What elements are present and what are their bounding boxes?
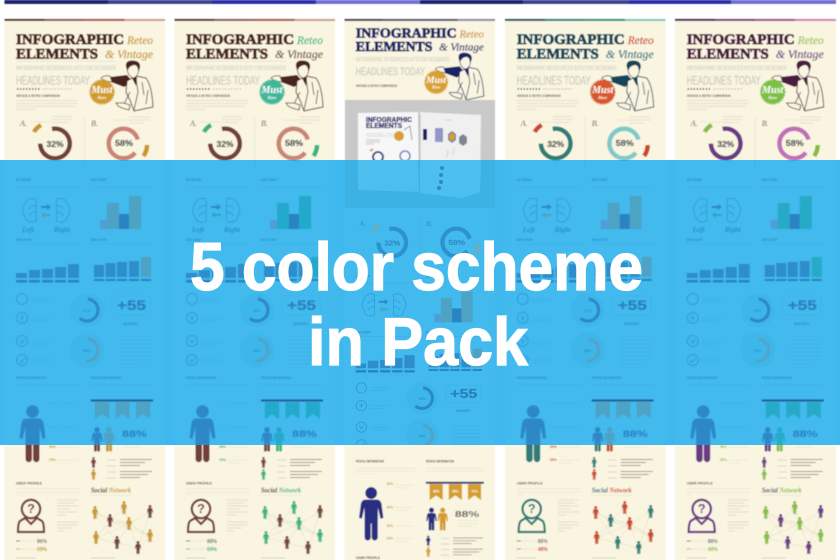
chart: donuts A and B: A. — [19, 119, 27, 128]
title: ELEMENTS — [16, 46, 98, 62]
headings block — [687, 65, 787, 98]
chart: donuts A and B: 58% — [115, 139, 133, 148]
panel: purple and green scheme column — [675, 19, 836, 560]
banner overlay: teal column charts: +55 — [618, 297, 647, 313]
people and social network section: 49% — [708, 547, 718, 553]
banner overlay: navy column charts: 58% — [448, 238, 466, 247]
banner overlay: teal column charts: PEOPLE INFORMATION — [592, 376, 622, 380]
people and social network section: 88% — [538, 539, 548, 545]
banner overlay: purple column charts: 55% — [754, 349, 762, 353]
chart: donuts A and B: B. — [91, 119, 98, 128]
people and social network section: 86% — [37, 539, 48, 545]
people and social network section: 88% — [207, 539, 218, 545]
chart: donuts A and B: 32% — [216, 140, 234, 149]
people and social network section: Social Network — [592, 486, 632, 494]
people and social network section: 39% — [550, 445, 558, 449]
people and social network section: ? — [528, 501, 536, 516]
badge: must have: Must — [761, 85, 784, 96]
banner overlay: teal column charts: BAR CHART — [592, 178, 608, 182]
headings block: HEADLINES TODAY — [186, 74, 260, 88]
badge: must have — [761, 80, 784, 104]
banner overlay: brown and gold column charts: 67% — [83, 309, 91, 313]
banner overlay: teal column charts: BUDGET — [624, 322, 640, 326]
badge: must have: Have — [597, 95, 607, 100]
headings block: VINTAGE & RETRO COMPARISON — [186, 94, 230, 98]
banner overlay: brown and green column charts: 55% — [253, 349, 261, 353]
banner overlay: purple column charts: Right — [724, 226, 742, 234]
badge: must have: Have — [97, 95, 107, 100]
headings block: HEADLINES TODAY — [356, 66, 425, 78]
chart: donuts A and B — [517, 61, 651, 168]
banner overlay: navy column charts: BAR CHART — [426, 275, 442, 279]
people and social network section: Social Network — [261, 486, 301, 494]
banner overlay: purple column charts: 67% — [754, 309, 762, 313]
lower section of navy column: USER PROFILE — [356, 556, 381, 560]
title: Reteo — [296, 35, 323, 47]
banner overlay: brown and gold column charts: BAR CHART — [16, 238, 33, 242]
lower section of navy column: PEOPLE INFORMATION — [426, 460, 454, 464]
people and social network section: Social Network — [91, 486, 131, 494]
title: Reteo — [627, 35, 654, 47]
people and social network section: 29% — [550, 458, 558, 462]
headings block: HEADLINES TODAY — [16, 74, 90, 88]
title: ELEMENTS — [186, 46, 268, 62]
people and social network section — [517, 385, 654, 558]
chart: donuts A and B — [16, 61, 150, 168]
lower section of navy column: 39% — [387, 524, 393, 528]
banner overlay: brown and gold column charts: 55% — [83, 349, 91, 353]
banner overlay: purple column charts: Left — [692, 226, 706, 234]
banner overlay: purple column charts: +55 — [788, 297, 817, 313]
banner overlay: brown and green column charts: Left — [191, 226, 205, 234]
banner overlay: purple column charts: 88% — [793, 429, 818, 439]
headings block: VINTAGE & RETRO COMPARISON — [16, 94, 60, 98]
banner overlay: navy column charts: A. — [358, 219, 366, 228]
chart: donuts A and B: 58% — [786, 139, 804, 148]
banner overlay: navy column charts: 32% — [384, 239, 401, 248]
banner overlay: brown and gold column charts: Left — [21, 226, 35, 234]
banner overlay: navy column charts: BUDGET — [456, 409, 471, 413]
illustration: retro man — [435, 53, 484, 100]
banner overlay: navy column charts — [356, 217, 484, 445]
lower section of navy column — [356, 460, 484, 560]
headings block: INFOGRAPHIC RESOURCES KITS FOR DESIGNER — [186, 65, 286, 72]
banner overlay: teal column charts: 67% — [584, 309, 592, 313]
chart: donuts A and B: A. — [189, 119, 197, 128]
chart: donuts A and B: 32% — [46, 140, 64, 149]
title: ELEMENTS — [517, 46, 599, 62]
banner overlay: brown and green column charts: BUDGET — [293, 322, 309, 326]
banner overlay: teal column charts: Right — [554, 226, 572, 234]
banner overlay: brown and gold column charts: 88% — [122, 429, 147, 439]
column artwork — [186, 32, 323, 558]
headings block — [517, 65, 617, 98]
panel: booklet preview: HEADLINES TODAY — [366, 133, 398, 139]
chart: donuts A and B: 32% — [717, 140, 734, 149]
banner overlay: purple column charts: BUDGET — [794, 322, 810, 326]
banner overlay: navy column charts: 55% — [419, 434, 426, 438]
headings block: HEADLINES TODAY — [687, 74, 761, 88]
headings block: VINTAGE & RETRO COMPARISON — [687, 94, 731, 98]
lower section of navy column: 72% — [471, 490, 478, 494]
banner overlay: brown and green column charts: 88% — [292, 429, 317, 439]
banner tint: faint column panels — [4, 160, 836, 445]
people and social network section: 39% — [720, 445, 728, 449]
chart: donuts A and B — [186, 61, 320, 168]
headings block: INFOGRAPHIC RESOURCES KITS FOR DESIGNER — [517, 65, 617, 72]
title: INFOGRAPHIC — [186, 32, 294, 48]
banner overlay: brown and green column charts: 67% — [253, 309, 261, 313]
chart: donuts A and B: A. — [520, 119, 528, 128]
banner overlay: purple column charts: BAR CHART — [762, 238, 778, 242]
title: ELEMENTS — [687, 46, 769, 62]
banner overlay: brown and gold column charts — [16, 160, 154, 445]
banner overlay: purple column charts: MY BRAIN — [687, 178, 702, 182]
illustration: retro man — [271, 60, 323, 111]
banner overlay: booklet seen through banner — [345, 160, 495, 208]
people and social network section — [186, 385, 323, 558]
banner overlay: teal column charts: BAR CHART — [517, 238, 533, 242]
lower section of navy column: PEOPLE INFORMATION — [356, 460, 384, 464]
banner overlay: navy column charts: 67% — [419, 397, 426, 401]
panel: brown and green scheme column — [174, 19, 335, 560]
people and social network section: 29% — [49, 458, 57, 462]
badge: must have: Must — [425, 76, 446, 86]
banner overlay: brown and green column charts: PEOPLE INFORMATION — [261, 376, 291, 380]
panel: booklet preview: ELEMENTS — [366, 121, 402, 130]
banner overlay: brown and green column charts: Right — [223, 226, 241, 234]
banner overlay: brown and gold column charts: PEOPLE INFORMATION — [91, 376, 121, 380]
title — [186, 32, 323, 62]
badge: must have: Have — [431, 86, 441, 90]
people and social network section — [16, 385, 153, 558]
badge: must have: Must — [260, 85, 284, 96]
title: & Vintage — [439, 41, 484, 53]
headings block — [16, 65, 116, 98]
people and social network section: 29% — [720, 458, 728, 462]
people and social network section: 39% — [219, 445, 227, 449]
title: Reteo — [126, 35, 153, 47]
title — [356, 26, 484, 55]
banner overlay: brown and green column charts — [186, 160, 324, 445]
people and social network section: 39% — [49, 445, 57, 449]
lower section of navy column: 39% — [387, 505, 393, 509]
headings block: VINTAGE & RETRO COMPARISON — [517, 94, 561, 98]
badge: must have: Have — [767, 95, 777, 100]
chart: donuts A and B: B. — [592, 119, 599, 128]
title: Reteo — [459, 28, 484, 40]
illustration: retro man — [101, 60, 153, 111]
title: Reteo — [797, 35, 824, 47]
panel: teal and orange scheme column — [505, 19, 666, 560]
people and social network section: USER PROFILE — [16, 482, 43, 486]
people and social network section — [687, 385, 824, 558]
people and social network section: ? — [27, 501, 35, 516]
chart: donuts A and B — [687, 61, 821, 168]
people and social network section: 69% — [207, 547, 218, 553]
badge: must have: Must — [591, 85, 614, 96]
banner overlay: brown and gold column charts: BUDGET — [123, 322, 139, 326]
banner overlay: brown and green column charts: PEOPLE INFORMATION — [186, 376, 216, 380]
banner overlay: brown and gold column charts: +55 — [117, 297, 146, 313]
badge: must have — [591, 80, 614, 104]
title: & Vintage — [105, 49, 153, 61]
lower section of navy column: 38% — [433, 490, 440, 494]
people and social network section: 69% — [37, 547, 48, 553]
people and social network section: ? — [698, 501, 706, 516]
title: & Vintage — [275, 49, 323, 61]
lower section of navy column: 29% — [387, 536, 393, 540]
banner overlay: brown and green column charts: BAR CHART — [261, 178, 278, 182]
banner overlay: brown and green column charts: MY BRAIN — [186, 178, 201, 182]
banner overlay: teal column charts: PEOPLE INFORMATION — [517, 376, 547, 380]
badge: must have — [260, 80, 284, 104]
banner overlay: teal column charts: Left — [522, 226, 536, 234]
banner overlay: brown and gold column charts: BAR CHART — [91, 238, 108, 242]
chart: donuts A and B: 58% — [616, 139, 634, 148]
banner overlay: purple column charts: PEOPLE INFORMATION — [762, 376, 792, 380]
panel: brown and gold scheme column — [4, 19, 165, 560]
chart: donuts A and B: B. — [261, 119, 268, 128]
title — [687, 32, 824, 62]
banner overlay: purple column charts: BAR CHART — [687, 238, 703, 242]
headings block: INFOGRAPHIC RESOURCES KITS FOR DESIGNER — [16, 65, 116, 72]
banner overlay: brown and green column charts: +55 — [287, 297, 316, 313]
panel: booklet preview — [345, 100, 495, 208]
banner overlay: teal column charts: BAR CHART — [592, 238, 608, 242]
banner overlay: brown and gold column charts: PEOPLE INFORMATION — [16, 376, 46, 380]
headings block: INFOGRAPHIC RESOURCES KITS FOR DESIGNER — [356, 58, 450, 64]
headings block: INFOGRAPHIC RESOURCES KITS FOR DESIGNER — [687, 65, 787, 72]
chart: donuts A and B: B. — [762, 119, 769, 128]
title: INFOGRAPHIC — [687, 32, 795, 48]
banner overlay: teal column charts: MY BRAIN — [517, 178, 532, 182]
title: & Vintage — [606, 49, 654, 61]
lower section of navy column: 45% — [452, 490, 459, 494]
panel: booklet preview: INFOGRAPHIC — [366, 115, 413, 124]
banner overlay: navy column charts: B. — [426, 219, 432, 228]
people and social network section: 88% — [708, 539, 718, 545]
illustration: retro man — [602, 60, 654, 111]
people and social network section: USER PROFILE — [517, 482, 543, 486]
chart: donuts A and B: 32% — [547, 140, 564, 149]
title: & Vintage — [776, 49, 824, 61]
title: INFOGRAPHIC — [356, 26, 457, 41]
banner overlay: navy column charts: BAR CHART — [356, 331, 371, 335]
banner overlay: teal column charts — [516, 160, 654, 445]
banner overlay: teal column charts: 55% — [584, 349, 592, 353]
banner heading: 5 color scheme — [190, 229, 643, 305]
banner overlay: brown and green column charts: BAR CHART — [261, 238, 278, 242]
blue banner — [0, 160, 840, 445]
banner overlay: navy column charts: MY BRAIN — [356, 275, 370, 279]
badge: must have: Must — [90, 85, 114, 96]
banner overlay: navy column charts: +55 — [450, 386, 477, 401]
title — [517, 32, 654, 62]
banner overlay: brown and gold column charts: BAR CHART — [91, 178, 108, 182]
title — [16, 32, 153, 62]
banner overlay: purple column charts: PEOPLE INFORMATION — [687, 376, 717, 380]
banner overlay: purple column charts: BAR CHART — [762, 178, 778, 182]
badge: must have: Have — [267, 95, 277, 100]
people and social network section: USER PROFILE — [687, 482, 713, 486]
illustration: retro man — [772, 60, 824, 111]
chart: donuts A and B: 58% — [285, 139, 303, 148]
panel: navy and gold scheme column — [344, 19, 495, 560]
banner overlay: purple column charts — [686, 160, 824, 445]
people and social network section: 29% — [219, 458, 227, 462]
badge: must have — [425, 71, 447, 93]
people and social network section: Social Network — [762, 486, 802, 494]
badge: must have — [90, 80, 114, 104]
people and social network section: ? — [197, 501, 205, 516]
headings block — [186, 65, 286, 98]
banner overlay: navy column charts: BAR CHART — [426, 331, 442, 335]
people and social network section: 48% — [538, 547, 548, 553]
column artwork — [517, 32, 654, 558]
banner overlay: brown and green column charts: BAR CHART — [186, 238, 203, 242]
banner heading: in Pack — [308, 304, 528, 380]
banner overlay: teal column charts: 88% — [623, 429, 648, 439]
banner heading — [190, 229, 643, 380]
headings block — [356, 58, 450, 88]
headings block: VINTAGE & RETRO COMPARISON — [356, 84, 397, 88]
people and social network section: USER PROFILE — [186, 482, 213, 486]
top colour strip — [4, 0, 836, 4]
lower section of navy column: 39% — [387, 482, 393, 486]
banner overlay: brown and gold column charts: MY BRAIN — [16, 178, 31, 182]
title: ELEMENTS — [356, 40, 433, 55]
title: INFOGRAPHIC — [517, 32, 625, 48]
column header artwork — [356, 26, 484, 100]
lower section of navy column: 88% — [455, 509, 480, 519]
chart: donuts A and B: A. — [690, 119, 698, 128]
title: INFOGRAPHIC — [16, 32, 124, 48]
banner overlay: brown and gold column charts: Right — [53, 226, 71, 234]
column artwork — [687, 32, 824, 558]
headings block: HEADLINES TODAY — [517, 74, 591, 88]
